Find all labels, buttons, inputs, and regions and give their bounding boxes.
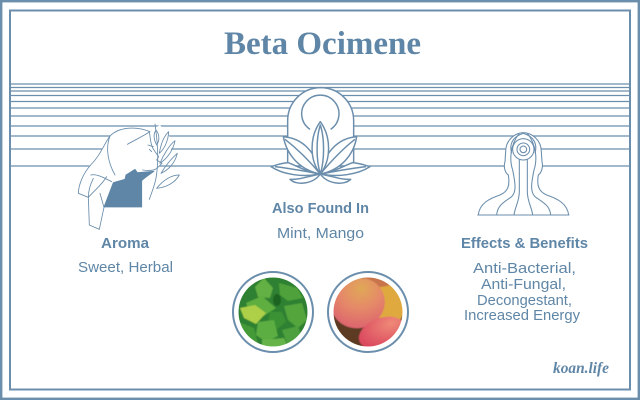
text: effects list: Anti-Bacterial, bbox=[473, 261, 576, 277]
text: effects list bbox=[464, 261, 581, 324]
icon: lotus with arch bbox=[271, 88, 370, 183]
heading: effects and benefits: Effects & Benefits bbox=[461, 236, 588, 252]
heading: also found in: Also Found In bbox=[272, 201, 369, 217]
brand mark: koan.life bbox=[553, 360, 609, 377]
text: effects list: Anti-Fungal, bbox=[481, 277, 566, 293]
image: mangoes bbox=[324, 270, 410, 355]
image: mint leaves bbox=[233, 272, 313, 352]
text: effects list: Decongestant, bbox=[477, 293, 572, 309]
icon: head with concentric mind rings bbox=[477, 133, 569, 215]
title: Beta Ocimene bbox=[224, 26, 421, 62]
text: aroma values: Sweet, Herbal bbox=[78, 260, 173, 276]
icon: woman smelling herb bbox=[78, 124, 179, 229]
text: found in values: Mint, Mango bbox=[277, 226, 364, 242]
heading: aroma: Aroma bbox=[101, 236, 150, 252]
text: effects list: Increased Energy bbox=[464, 308, 581, 324]
